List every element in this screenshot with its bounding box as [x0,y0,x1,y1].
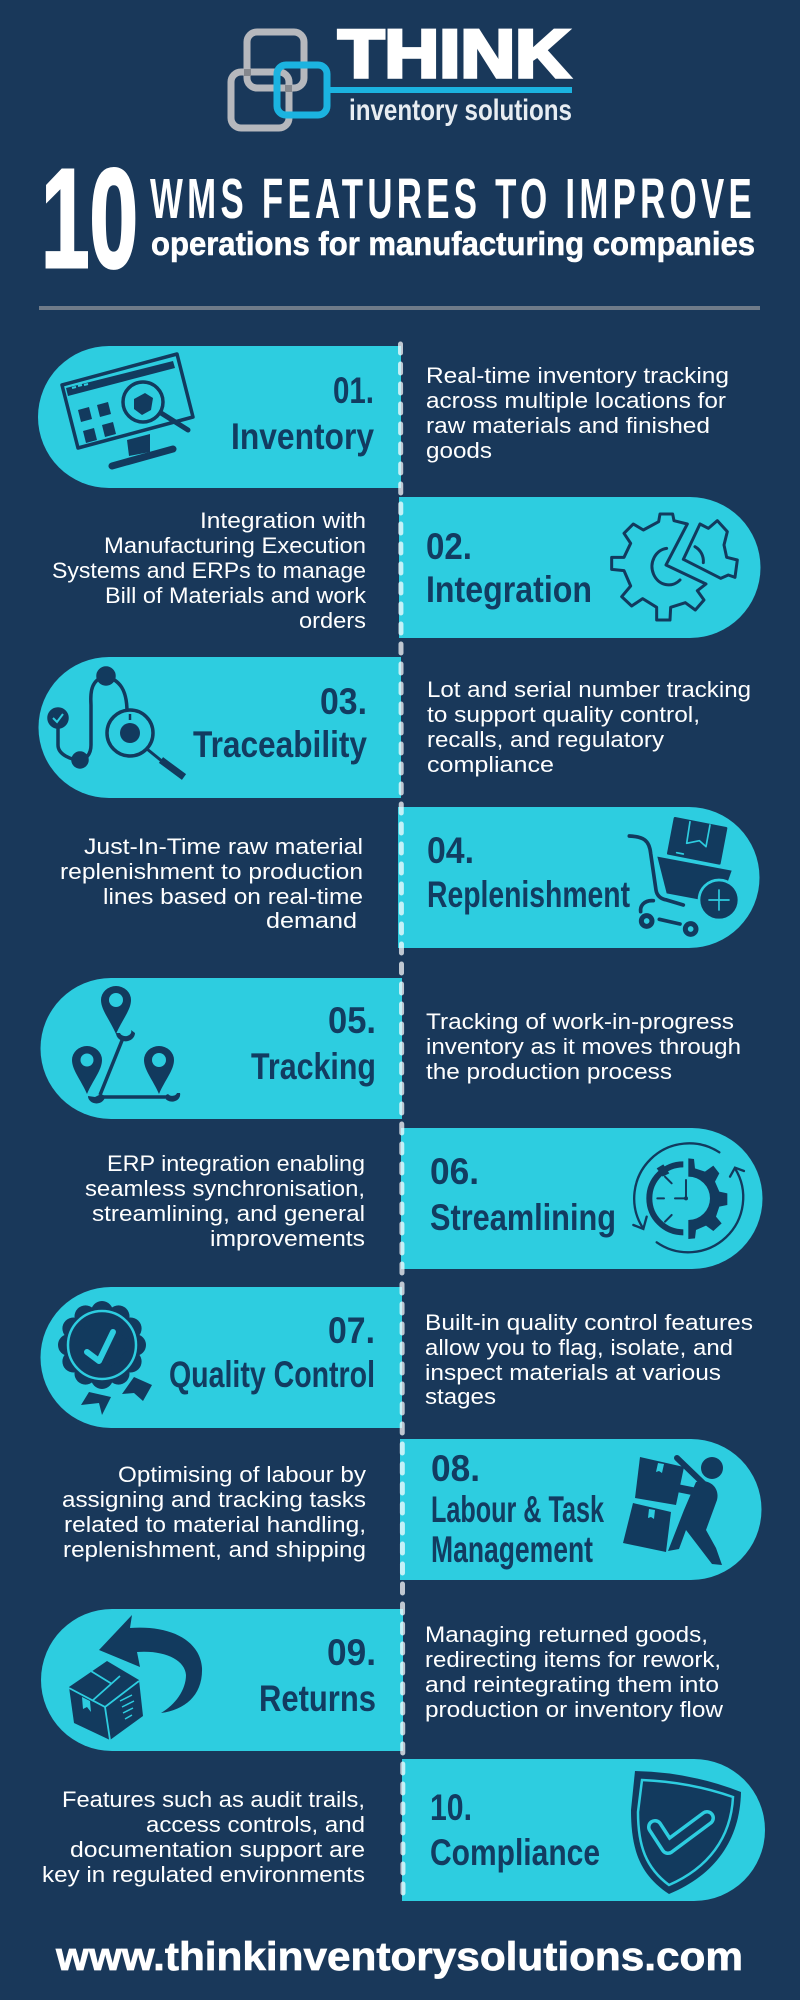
heading Compliance: Compliance [430,1832,600,1873]
icon: rosette badge [58,1301,152,1415]
description 04: lines based on real-time [103,884,363,909]
panel: 09 Returns [41,1609,403,1751]
title number 10: 10 [41,139,138,297]
description 07: Built-in quality control features [425,1310,753,1335]
title line 2: operations for manufacturing companies [151,225,755,262]
panel: 04 Replenishment [398,807,760,948]
panel: 06 Streamlining [401,1128,762,1269]
icon: clock and gear cycle [633,1143,744,1252]
heading Quality Control: Quality Control [169,1354,375,1395]
description 09 [425,1622,724,1722]
number 09: 09. [327,1632,376,1673]
number 10: 10. [430,1787,472,1828]
description 02: Systems and ERPs to manage [52,558,366,583]
panel: 01 Inventory [38,346,401,488]
panel: 08 Labour & Task Management [400,1439,762,1580]
description 10: key in regulated environments [42,1862,365,1887]
icon: gears [612,514,737,620]
description 09: Managing returned goods, [425,1622,708,1647]
panel: 07 Quality Control [40,1287,402,1428]
description 03: compliance [427,752,554,777]
description 02: Manufacturing Execution [104,533,366,558]
heading Streamlining: Streamlining [430,1197,616,1238]
pill 07 [40,1287,402,1428]
number 03: 03. [320,681,367,722]
description 09: redirecting items for rework, [425,1647,721,1672]
heading Inventory: Inventory [231,416,374,457]
icon: shield with check [631,1771,741,1894]
description 06: ERP integration enabling [107,1151,365,1176]
description 08: assigning and tracking tasks [62,1487,366,1512]
description 07 [425,1310,753,1409]
description 07: stages [425,1384,496,1409]
description 09: production or inventory flow [425,1697,724,1722]
description 03: Lot and serial number tracking [427,677,751,702]
icon: cart with box [629,818,739,934]
description 07: inspect materials at various [425,1360,721,1385]
description 07: allow you to flag, isolate, and [425,1335,733,1360]
description 08: replenishment, and shipping [63,1537,366,1562]
logo tagline: inventory solutions [349,94,572,127]
pill 02 [399,497,760,638]
description 06: seamless synchronisation, [85,1176,365,1201]
number 01: 01. [333,370,374,411]
description 03 [427,677,751,777]
description 06: streamlining, and general [92,1201,365,1226]
number 04: 04. [427,830,474,871]
panel: 02 Integration [399,497,760,638]
panel: 03 Traceability [38,657,401,798]
description 06: improvements [210,1226,365,1251]
pill 06 [401,1128,762,1269]
description 06 [85,1151,365,1251]
description 03: recalls, and regulatory [427,727,665,752]
number 08: 08. [431,1448,480,1489]
description 10: access controls, and [146,1812,365,1837]
logo wordmark: THINK [338,16,570,92]
description 10 [42,1787,365,1887]
pill 08 [400,1439,762,1580]
number 06: 06. [430,1151,479,1192]
heading Labour & Task Management: Management [431,1529,593,1570]
description 05 [426,1009,741,1084]
description 08: Optimising of labour by [118,1462,367,1487]
heading Returns: Returns [259,1678,376,1719]
icon: monitor with magnifier [62,354,193,466]
description 10: Features such as audit trails, [62,1787,365,1812]
pill 03 [38,657,401,798]
heading Labour & Task Management [431,1489,604,1570]
panel: 05 Tracking [40,978,402,1119]
logo: Think Inventory Solutions [231,16,572,128]
icon: returned box with arrow [69,1615,202,1740]
number 02: 02. [426,526,472,567]
website url: www.thinkinventorysolutions.com [55,1935,743,1979]
description 08: related to material handling, [64,1512,366,1537]
description 02: orders [299,608,366,633]
description 04: Just-In-Time raw material [84,834,363,859]
description 01: across multiple locations for [426,388,727,413]
description 08 [62,1462,367,1562]
description 01: goods [426,438,492,463]
pill 05 [40,978,402,1119]
description 01 [426,363,729,463]
description 02 [52,508,367,633]
heading Tracking: Tracking [251,1046,376,1087]
icon: route and magnifier [49,668,184,777]
description 03: to support quality control, [427,702,700,727]
description 02: Bill of Materials and work [105,583,367,608]
description 09: and reintegrating them into [425,1672,719,1697]
number 07: 07. [328,1310,375,1351]
pill 04 [398,807,760,948]
title [41,139,756,297]
description 01: raw materials and finished [426,413,710,438]
description 05: Tracking of work-in-progress [426,1009,734,1034]
heading Replenishment: Replenishment [427,874,630,915]
description 04: demand [266,908,357,933]
number 05: 05. [328,1000,376,1041]
description 02: Integration with [200,508,366,533]
pill 01 [38,346,401,488]
panel: 10 Compliance [402,1759,765,1901]
heading Labour & Task Management: Labour & Task [431,1489,604,1530]
description 05: inventory as it moves through [426,1034,741,1059]
icon: linked squares [231,32,572,128]
pill 09 [41,1609,403,1751]
heading Traceability: Traceability [193,724,367,765]
icon: worker carrying boxes [623,1457,723,1565]
description 10: documentation support are [70,1837,365,1862]
description 05: the production process [426,1059,672,1084]
heading Integration: Integration [426,569,592,610]
pill 10 [402,1759,765,1901]
description 04 [60,834,363,933]
icon: location pins [72,986,180,1103]
description 04: replenishment to production [60,859,363,884]
description 01: Real-time inventory tracking [426,363,729,388]
